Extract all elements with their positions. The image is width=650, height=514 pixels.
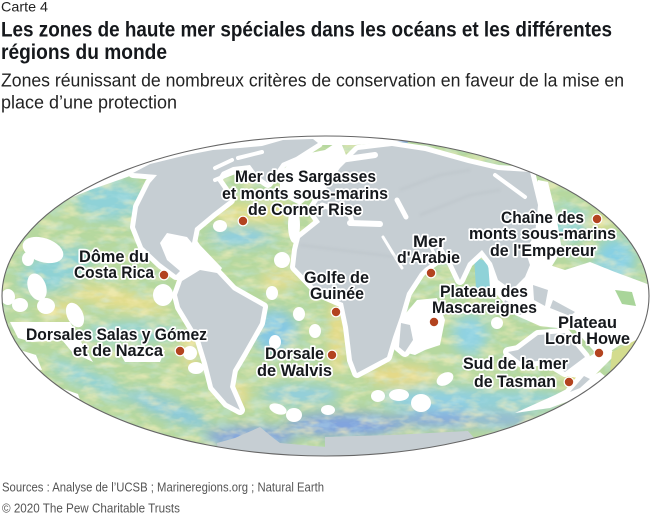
yellow-green rim patch	[610, 340, 636, 371]
marker: Dôme du Costa Rica: Costa Rica	[74, 264, 155, 282]
marker: Dôme du Costa Rica: Dôme du	[79, 248, 149, 266]
marker: Golfe de Guinée: Golfe de	[304, 269, 369, 287]
sources: Sources : Analyse de l’UCSB ; Marineregions.org ; Natural Earth	[2, 480, 324, 494]
marker: Dorsale de Walvis	[257, 345, 337, 380]
arctic slivers	[398, 141, 408, 143]
marker: Golfe de Guinée: Guinée	[310, 285, 364, 303]
marker: Dorsale de Walvis: de Walvis	[257, 362, 332, 380]
marker: Dôme du Costa Rica	[74, 248, 169, 282]
globe outline	[2, 136, 649, 456]
inland seas and arctic channels	[215, 152, 525, 268]
subtitle line 2: place d’une protection	[1, 92, 177, 112]
marker: Golfe de Guinée	[304, 269, 369, 317]
marker: Sud de la mer de Tasman: Sud de la mer	[463, 355, 569, 373]
marker: Plateau Lord Howe: Lord Howe	[545, 330, 630, 348]
header text	[1, 0, 624, 112]
marker: Dorsale de Walvis: Dorsale	[265, 345, 324, 363]
marker: Mer d'Arabie: d'Arabie	[397, 249, 460, 267]
marker: Mer des Sargasses: et monts sous-marins	[222, 185, 388, 203]
marker: Dorsales Salas y Gómez et de Nazca: Dorsales Salas y Gómez	[26, 326, 207, 344]
bay of bengal	[474, 257, 490, 288]
marker: Plateau Lord Howe	[545, 314, 630, 358]
land shading	[392, 255, 396, 259]
marker: Sud de la mer de Tasman	[463, 355, 574, 391]
marker: Chaîne des monts sous-marins de l'Empereur	[469, 209, 616, 260]
marker: Mer d'Arabie	[397, 233, 460, 278]
title line 2: régions du monde	[1, 41, 167, 64]
marker: Plateau des Mascareignes: Plateau des	[440, 283, 528, 301]
marker: Chaîne des monts sous-marins de l'Empereur: Chaîne des	[501, 209, 584, 227]
marker: Plateau des Mascareignes: Mascareignes	[432, 299, 537, 317]
marker: Mer des Sargasses: de Corner Rise	[248, 201, 362, 219]
subtitle: Zones réunissant de nombreux critères de conservation en faveur de la mise en	[1, 70, 624, 90]
indonesian islands	[503, 285, 575, 316]
marker: Mer des Sargasses: Mer des Sargasses	[235, 168, 376, 186]
ocean colour field	[0, 130, 650, 460]
coastal halo	[133, 139, 590, 410]
antarctica	[217, 427, 474, 456]
marker: Plateau Lord Howe: Plateau	[558, 314, 617, 332]
marker: Mer d'Arabie: Mer	[413, 233, 446, 251]
marker: Mer des Sargasses	[222, 168, 388, 226]
marker: Sud de la mer de Tasman: de Tasman	[474, 373, 556, 391]
marker: Dorsales Salas y Gómez et de Nazca	[26, 326, 207, 360]
marker: Plateau des Mascareignes	[429, 283, 537, 327]
continents	[133, 139, 590, 410]
marker: Chaîne des monts sous-marins de l'Empereur: monts sous-marins	[469, 225, 616, 243]
marker: Chaîne des monts sous-marins de l'Empereur: de l'Empereur	[490, 242, 597, 260]
pacific green inset	[615, 290, 636, 306]
white excluded zones	[0, 130, 650, 422]
world map	[0, 130, 650, 470]
marker: Dorsales Salas y Gómez et de Nazca: et de Nazca	[73, 342, 164, 360]
